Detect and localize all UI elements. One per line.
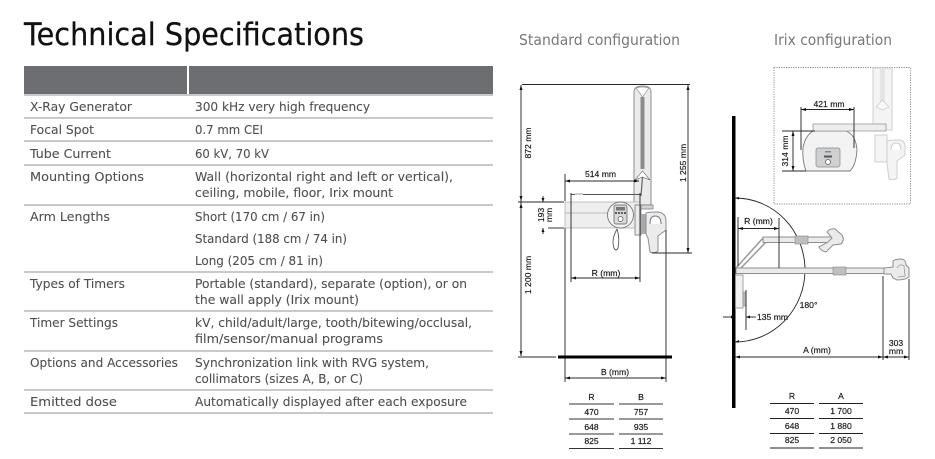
table: R and A values: 648 (785, 421, 799, 431)
table rows: 300 kHz very high frequency (195, 100, 370, 115)
dimension labels: mm (889, 346, 903, 356)
wall (732, 116, 736, 408)
dimension lines (782, 107, 854, 171)
title: Technical Specifications (23, 17, 364, 53)
table rows: 0.7 mm CEI (195, 123, 263, 138)
dimension labels: R (mm) (744, 216, 773, 226)
table rows: the wall apply (Irix mount) (195, 293, 359, 308)
dimension labels: 872 mm (523, 127, 533, 159)
dimension labels: 514 mm (585, 169, 616, 179)
table rows: Options and Accessories (30, 356, 178, 371)
table: R and A values: 1 880 (830, 421, 852, 431)
table rows: Focal Spot (30, 123, 94, 138)
dimension labels (744, 216, 903, 356)
table rows: Synchronization link with RVG system, (195, 356, 429, 371)
heading: standard configuration: Standard configuration (519, 31, 680, 49)
wall mount (736, 275, 746, 308)
table rows: Long (205 cm / 81 in) (195, 254, 323, 269)
dimension labels: 1 255 mm (678, 144, 688, 182)
heading: irix configuration: Irix configuration (774, 31, 892, 49)
diagram: irix configuration top view (723, 116, 909, 408)
faded column and head (873, 68, 905, 180)
dimension labels: 180° (800, 300, 817, 310)
table rows: X-Ray Generator (30, 100, 133, 115)
table: R and B values: R (588, 392, 595, 402)
dimension labels: 303 (889, 338, 903, 348)
diagram: irix ceiling detail (774, 68, 910, 204)
dimension labels (780, 99, 845, 167)
column and tube arm (565, 86, 653, 228)
table rows: Mounting Options (30, 170, 144, 185)
diagram: standard configuration (518, 84, 692, 382)
table header band (24, 66, 493, 94)
table: R and B values: 757 (634, 407, 648, 417)
folded arm (736, 229, 843, 268)
dimension labels: B (mm) (601, 367, 629, 377)
dimension labels: R (mm) (592, 268, 620, 278)
dimension labels: 193 (536, 208, 546, 222)
dimension labels: A (mm) (803, 345, 831, 355)
floor line (558, 356, 672, 358)
icon: x-ray head (635, 205, 666, 253)
table rows: ceiling, mobile, floor, Irix mount (195, 186, 393, 201)
table rows: Emitted dose (30, 395, 117, 410)
dimension lines (518, 84, 692, 382)
table rows: film/sensor/manual programs (195, 332, 383, 347)
table rows: Timer Settings (29, 316, 118, 331)
table rows: Types of Timers (29, 277, 125, 292)
swing arc (735, 198, 805, 342)
dimension labels: 421 mm (813, 99, 845, 109)
table rows (24, 95, 493, 413)
dimension labels: mm (544, 208, 554, 222)
table: R and A values: R (789, 391, 795, 401)
dotted frame (774, 68, 910, 204)
table rows: Standard (188 cm / 74 in) (195, 232, 347, 247)
dimension labels: 135 mm (757, 312, 788, 322)
table rows: Portable (standard), separate (option), or on (195, 277, 467, 292)
table: R and B values: 648 (584, 422, 599, 432)
table: R and B values: 825 (584, 436, 599, 446)
dimension lines (723, 197, 909, 360)
dimension labels (523, 127, 688, 377)
extended arm (736, 259, 909, 280)
table: R and A values: 825 (785, 435, 799, 445)
dimension labels: 314 mm (780, 135, 790, 167)
table: R and A values: 470 (785, 406, 799, 416)
table rows: kV, child/adult/large, tooth/bitewing/occlusal, (195, 316, 472, 331)
table: R and B values: 935 (634, 422, 648, 432)
table: R and A values: 1 700 (830, 406, 852, 416)
table: R and A values: A (838, 391, 844, 401)
table rows: 60 kV, 70 kV (195, 147, 269, 162)
table: R and B values: 1 112 (631, 436, 652, 446)
table: R and B values: B (638, 392, 644, 402)
table: R and A values (770, 391, 863, 448)
table rows: Short (170 cm / 67 in) (195, 210, 325, 225)
specifications table (24, 66, 493, 413)
icon: timer handset (608, 202, 634, 250)
table rows: Automatically displayed after each exposure (195, 395, 467, 410)
table: R and A values: 2 050 (830, 435, 852, 445)
dimension labels: 1 200 mm (523, 256, 533, 294)
tube head (803, 124, 886, 171)
table rows: Tube Current (29, 147, 111, 162)
table rows: Arm Lengths (30, 210, 110, 225)
table rows: Wall (horizontal right and left or vertical), (195, 170, 453, 185)
table rows: collimators (sizes A, B, or C) (195, 372, 363, 387)
table: R and B values (569, 392, 663, 448)
table: R and B values: 470 (584, 407, 599, 417)
